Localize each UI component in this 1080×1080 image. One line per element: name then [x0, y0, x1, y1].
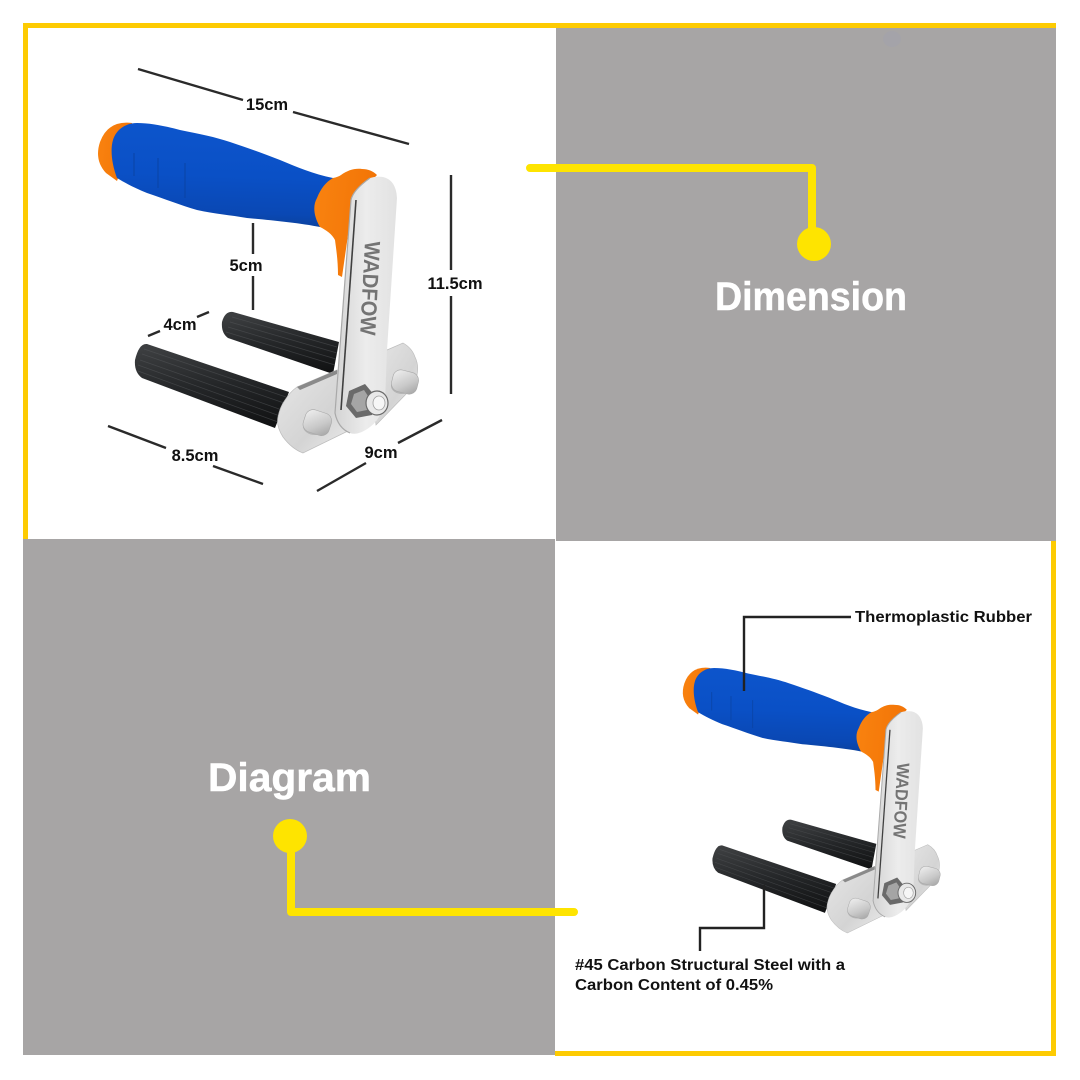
stud: right [390, 368, 420, 396]
heading: Diagram: Diagram [208, 756, 371, 800]
dimension: 8.5cm: 8.5cm [172, 447, 218, 465]
dimension: 4cm: 4cm [163, 316, 197, 334]
callout: carbon steel [575, 885, 845, 994]
callout: Thermoplastic Rubber: Thermoplastic Rubber [855, 609, 1032, 626]
dimension: 11.5cm: 11.5cm [427, 275, 483, 293]
connector: dimension arrow [530, 168, 831, 261]
callout: Thermoplastic Rubber [744, 609, 1032, 691]
steel arm [335, 177, 397, 434]
dimension: 5cm: 5cm [229, 257, 263, 275]
dimension: 15cm [138, 69, 409, 144]
callout: carbon steel: #45 Carbon Structural Steel with a [575, 957, 845, 974]
centre bolt [346, 384, 388, 418]
steel arm [873, 711, 923, 918]
stud: right [917, 865, 942, 887]
panel: diagram grey block [23, 539, 555, 1055]
connector: diagram arrow [273, 819, 574, 912]
brand text: WADFOW [889, 763, 913, 839]
stud: left [846, 896, 872, 921]
heading: Dimension: Dimension [715, 275, 907, 319]
dimension: 5cm [229, 223, 263, 310]
dimension: 4cm [148, 312, 209, 336]
mounting plates [827, 845, 942, 933]
panel: dimension grey block [556, 28, 1056, 541]
product photo: dimension view [98, 123, 420, 453]
dimension: 15cm: 15cm [246, 96, 288, 114]
rods [135, 312, 339, 428]
dimension: 9cm [317, 420, 442, 491]
mounting plates [278, 343, 420, 453]
callout: carbon steel: Carbon Content of 0.45% [575, 977, 773, 994]
dimension: 9cm: 9cm [364, 444, 398, 462]
centre bolt [882, 878, 916, 905]
stud: left [301, 408, 334, 438]
handle [683, 668, 907, 792]
rods [712, 820, 876, 913]
dimension: 8.5cm [108, 426, 263, 484]
brand text: WADFOW [355, 241, 385, 336]
handle [98, 123, 377, 277]
product photo: diagram view [683, 668, 942, 933]
